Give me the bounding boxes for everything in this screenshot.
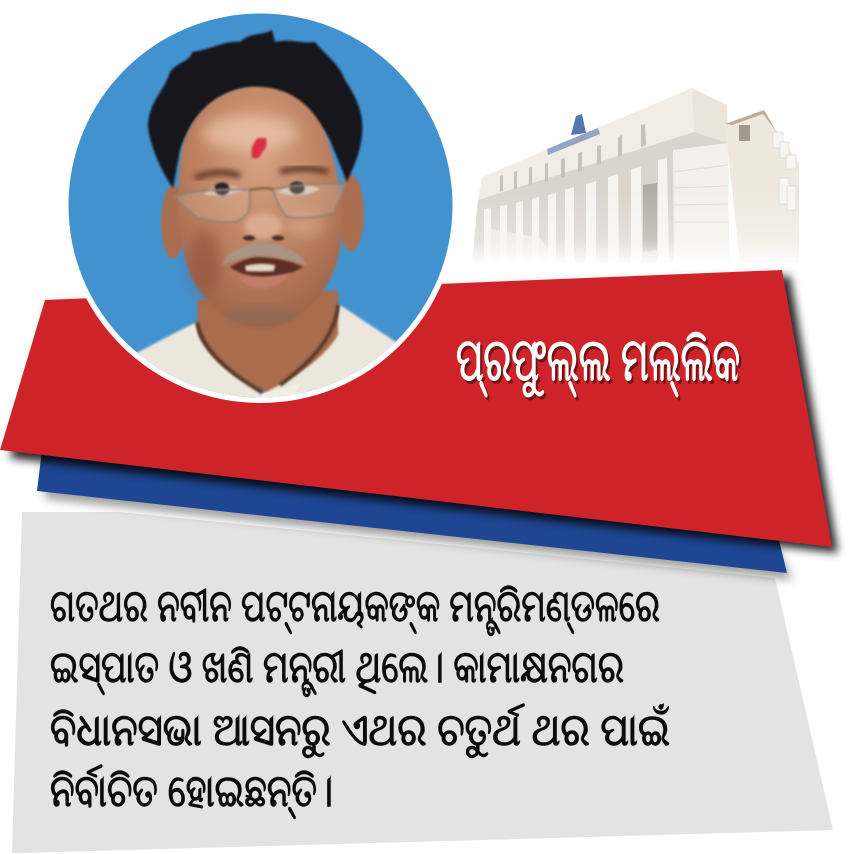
building side wing: [725, 110, 799, 263]
name heading: [456, 326, 742, 401]
mouth: [230, 257, 303, 277]
collar: [197, 322, 262, 392]
portrait: [63, 8, 458, 410]
tilak: [252, 138, 266, 158]
body text: [50, 580, 670, 819]
text line 4: ନିର୍ବାଚିତ ହୋଇଛନ୍ତି।: [50, 764, 333, 819]
cheek shade: [190, 230, 220, 294]
building pier: [673, 143, 729, 263]
building upper facade: [478, 88, 694, 200]
portrait ring: [63, 8, 458, 403]
chin stubble: [226, 305, 298, 325]
building tower: [692, 88, 728, 143]
forehead highlight: [202, 115, 298, 151]
portrait background: [68, 14, 452, 398]
shirt: [136, 304, 396, 398]
text line 2: ଇସ୍ପାତ ଓ ଖଣି ମନ୍ତ୍ରୀ ଥିଲେ। କାମାକ୍ଷନଗର: [50, 641, 624, 698]
ribbon: blue: [37, 450, 787, 573]
nose: [244, 213, 282, 239]
shadow: red banner: [10, 276, 838, 553]
cheek highlights: [285, 213, 325, 237]
moustache: [223, 242, 307, 265]
building emblem: [571, 114, 586, 135]
shadow: blue ribbon: [42, 468, 792, 580]
text line 3: ବିଧାନସଭା ଆସନରୁ ଏଥର ଚତୁର୍ଥ ଥର ପାଇଁ: [50, 703, 670, 759]
hair: [148, 30, 362, 188]
face: [178, 87, 342, 328]
building: assembly: [468, 88, 808, 272]
ears: [161, 185, 185, 259]
panel: grey text panel: [12, 512, 833, 853]
eyes: [203, 182, 320, 196]
glasses: [175, 184, 345, 222]
brows: [195, 168, 328, 178]
building sign: [547, 128, 600, 155]
building colonnade: [472, 132, 729, 263]
banner: red: [0, 270, 832, 547]
neck: [197, 290, 338, 392]
